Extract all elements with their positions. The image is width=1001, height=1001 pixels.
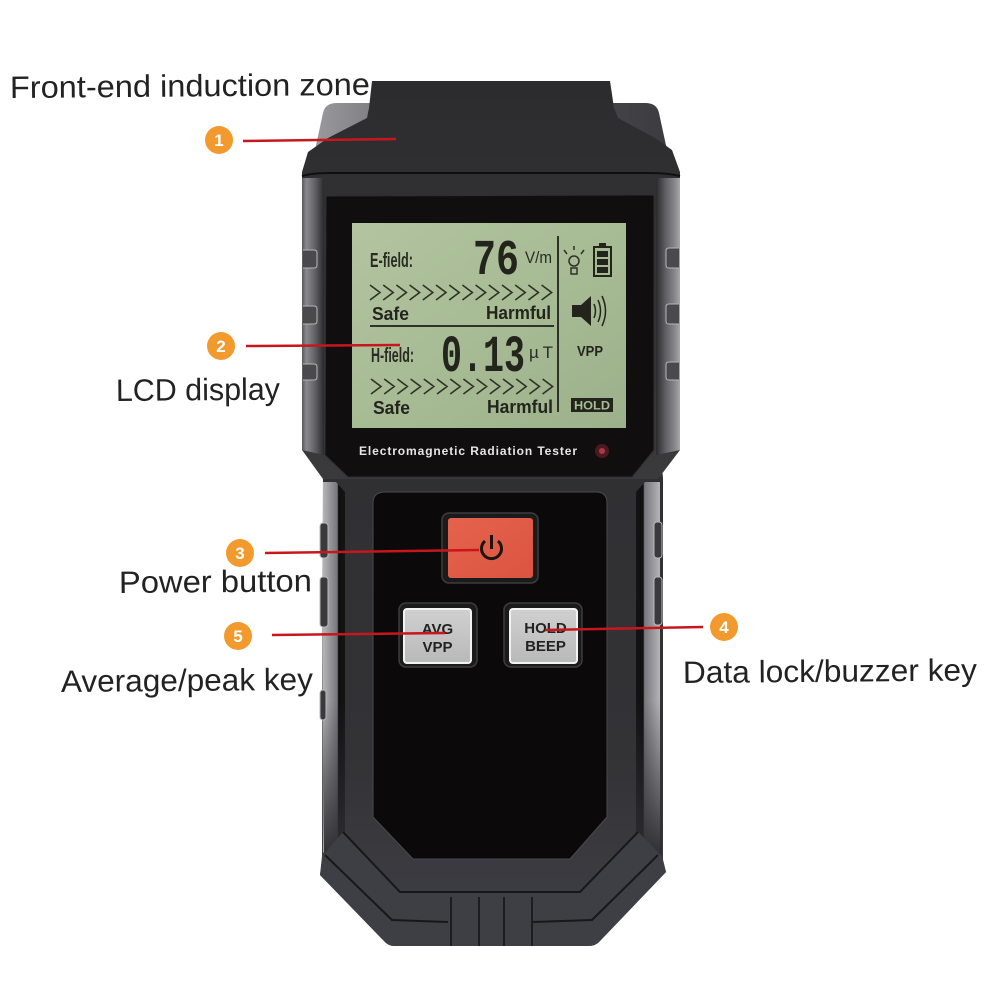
H-field value: 0.13 (441, 328, 525, 387)
callout 3: power button: 3 (235, 544, 245, 563)
callout 3: power button: Power button (119, 563, 312, 600)
E-field label: E-field: (370, 250, 413, 272)
keypad panel (373, 492, 607, 859)
display bezel (325, 195, 654, 477)
right grip strip (636, 482, 660, 853)
strip notches (303, 248, 679, 380)
callout 2: LCD display: 2 (216, 337, 226, 356)
AVG VPP key: AVG (422, 621, 453, 638)
HOLD BEEP key: HOLD (524, 620, 567, 637)
callout 2: LCD display (116, 332, 400, 408)
callout 5: average/peak key (61, 622, 445, 699)
Harmful label: Harmful (486, 303, 551, 323)
Safe label: Safe (372, 304, 409, 324)
LCD screen (352, 223, 626, 428)
Safe label: Safe (373, 398, 410, 418)
strip fade at base (322, 700, 662, 856)
head shoulders (315, 103, 667, 150)
grip slots left (320, 523, 328, 720)
left grip strip (323, 482, 345, 853)
callout 5: average/peak key: Average/peak key (61, 662, 314, 699)
H-field unit: µT (529, 343, 553, 362)
icon: speaker (572, 296, 606, 326)
HOLD indicator: HOLD (574, 398, 610, 412)
callout 1: front-end induction zone: Front-end induction zone (10, 67, 370, 105)
head side strip right (656, 178, 680, 455)
VPP indicator: VPP (577, 343, 603, 360)
E-field unit: V/m (525, 248, 552, 267)
HOLD BEEP key (504, 603, 582, 667)
device lower body (320, 470, 666, 946)
AVG VPP key: VPP (422, 639, 453, 656)
callout 4: data lock/buzzer key (545, 613, 978, 690)
head side strip left (302, 178, 324, 455)
H-field label: H-field: (371, 345, 414, 367)
device: electromagnetic radiation tester (302, 81, 680, 946)
bottom ridges (451, 897, 532, 946)
seam line (302, 173, 680, 176)
indicator LED (595, 444, 609, 458)
callout 1: front-end induction zone: 1 (214, 131, 224, 150)
AVG VPP key (399, 603, 477, 667)
lower bumper outline (325, 832, 658, 922)
icon: power (482, 535, 502, 559)
callout 3: power button (119, 539, 479, 600)
vertical divider (557, 236, 559, 412)
callout 2: LCD display: LCD display (116, 372, 281, 408)
H-field level arrows (371, 379, 553, 394)
icon: battery (594, 243, 611, 276)
E-field level arrows (370, 285, 552, 300)
lower flare panel (320, 832, 666, 946)
callout 4: data lock/buzzer key: Data lock/buzzer key (683, 652, 978, 690)
HOLD BEEP key: BEEP (525, 638, 566, 655)
callout 5: average/peak key: 5 (233, 627, 243, 646)
power button (442, 513, 538, 583)
grip slots right (654, 522, 662, 625)
Harmful label: Harmful (487, 397, 553, 417)
product name: Electromagnetic Radiation Tester (359, 444, 577, 458)
E-field value: 76 (473, 233, 519, 290)
callout 1: front-end induction zone (10, 67, 396, 154)
head housing (302, 81, 680, 479)
divider (370, 325, 554, 327)
callout 4: data lock/buzzer key: 4 (719, 618, 729, 637)
icon: bulb (564, 246, 584, 274)
